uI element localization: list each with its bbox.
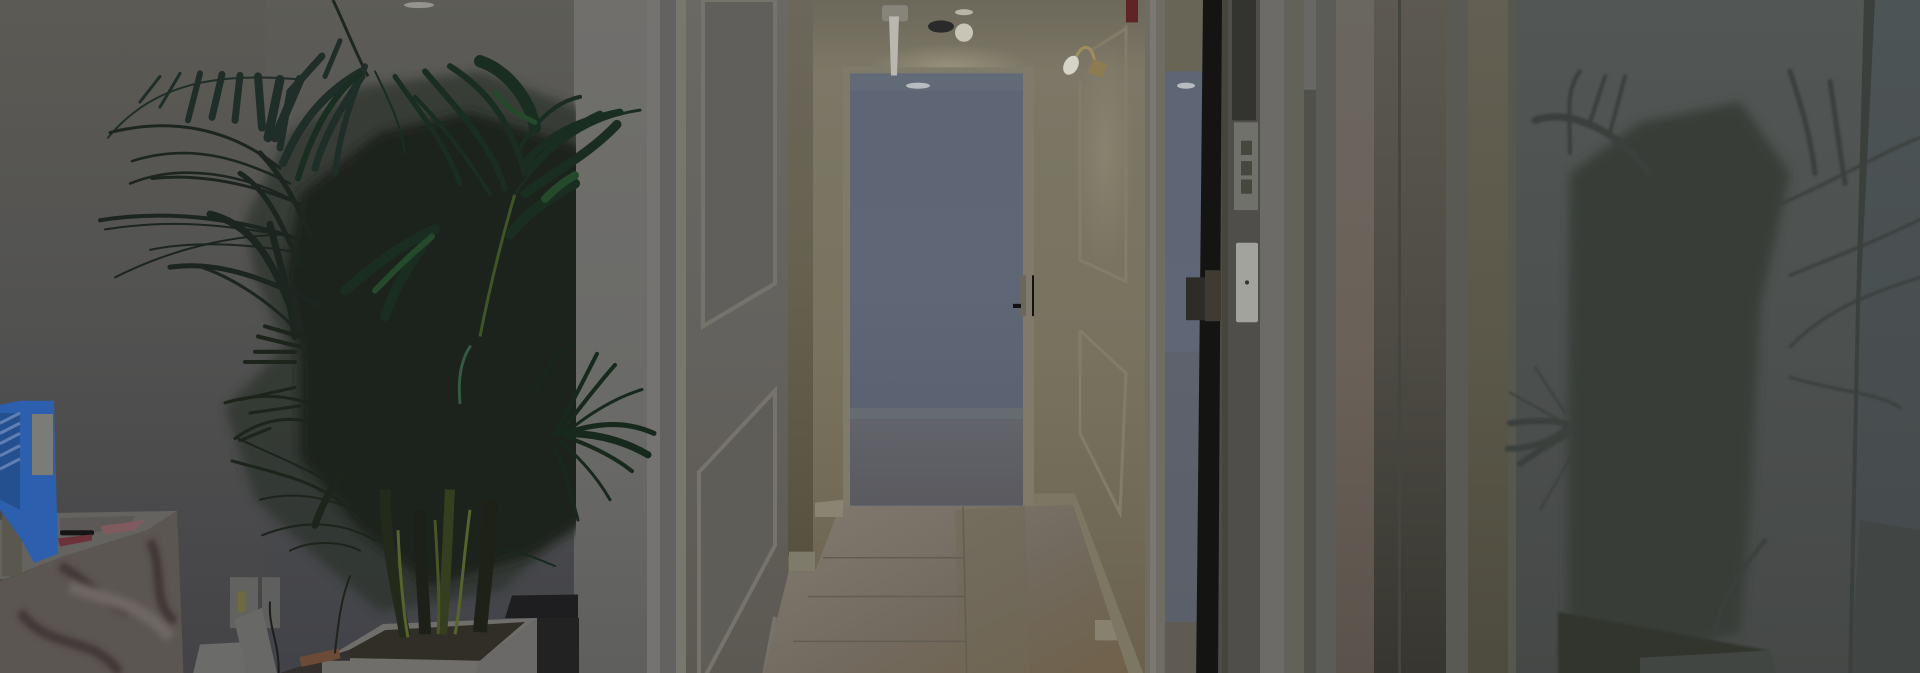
open door leaf and handle: [1013, 73, 1034, 506]
lower moulded panel: [699, 391, 775, 673]
glass door frame and reflection: [1145, 0, 1203, 673]
ceiling light in back room: [404, 2, 434, 8]
plant: sparse outer foliage haze: [225, 71, 590, 612]
planter reflection: [1558, 612, 1770, 673]
blue file holder: [0, 401, 58, 563]
red fire alarms: [1126, 0, 1173, 22]
plant: left fronds: [100, 126, 320, 347]
plant: lower left fronds: [225, 326, 375, 653]
frosted glass wall: main pane: [1516, 0, 1920, 673]
white column beside plant: [574, 0, 676, 673]
upper moulded panel: [703, 0, 775, 326]
plant: palm in planter: [100, 0, 654, 653]
glass pane seam line: [1848, 0, 1875, 673]
plant: upper left frond: [108, 41, 365, 173]
corridor: right wall moulded panels: [1080, 25, 1126, 513]
frosted glass wall: vertical frames: [1316, 0, 1518, 673]
plant: dark foliage core: [285, 112, 600, 586]
metal door post with sign and card reader: [1228, 0, 1260, 673]
keyboard and dark desk: [505, 594, 579, 673]
corridor: floor tiles: [760, 494, 1145, 673]
white planter: [278, 618, 537, 673]
plant reflection in glass: [1508, 71, 1920, 673]
plant: bright highlight leaves: [375, 92, 575, 291]
plant: upper right frond: [298, 61, 640, 316]
corridor: hall walls and ceiling: [788, 0, 1147, 673]
corridor: left wall panel: [676, 0, 788, 673]
plant: stems: [333, 0, 515, 637]
corridor: receding pillar: [788, 0, 815, 571]
ceiling sensor and camera: [882, 5, 973, 75]
wall sconce lamp: [1060, 47, 1107, 78]
left wall: [0, 0, 577, 673]
plant: lower right frond: [459, 342, 654, 566]
wall sockets and paper: [190, 577, 280, 673]
white door jamb: [1260, 0, 1316, 673]
doorway into blue room: [843, 67, 1033, 506]
marble reception counter: [0, 511, 184, 673]
dark door edge with lock: [1186, 0, 1230, 673]
